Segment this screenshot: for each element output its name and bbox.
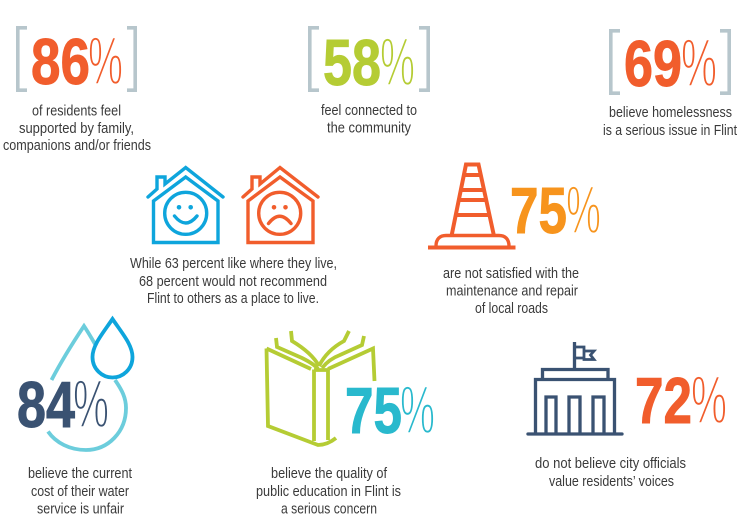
stat: 84 percent water [17, 319, 133, 518]
caption officials [535, 455, 686, 490]
stat: 75 percent education [256, 331, 435, 518]
caption water: service is unfair [37, 500, 124, 518]
caption 58%: the community [327, 120, 411, 136]
caption water: believe the current [28, 465, 133, 482]
number 75% orange: 75 [510, 174, 567, 247]
caption houses: 68 percent would not recommend [139, 273, 327, 290]
number 84%: % [73, 366, 109, 442]
number 69%: 69 [624, 27, 682, 100]
number 86%: % [88, 23, 123, 99]
caption houses: While 63 percent like where they live, [130, 255, 337, 272]
caption roads: of local roads [475, 300, 548, 317]
icon: happy house [148, 168, 223, 242]
caption education: public education in Flint is [256, 483, 401, 500]
icon: government building [528, 342, 622, 434]
caption 58% [321, 102, 417, 136]
number 75% orange: % [566, 172, 601, 248]
number 84%: 84 [17, 368, 75, 441]
brackets [18, 28, 135, 90]
stat: 75 percent roads [428, 164, 601, 317]
caption officials: do not believe city officials [535, 455, 686, 472]
caption 86%: companions and/or friends [3, 137, 151, 154]
stat: 72 percent officials [528, 342, 727, 490]
caption education [256, 465, 401, 518]
brackets [611, 31, 729, 93]
caption roads: are not satisfied with the [443, 265, 579, 282]
icon: traffic cone [428, 164, 516, 248]
icon: sad house [243, 168, 318, 242]
stat: 58 percent connected [310, 24, 428, 136]
number 72%: 72 [635, 364, 692, 437]
caption water: cost of their water [31, 483, 129, 500]
stat: 86 percent supported [3, 23, 151, 154]
number 86%: 86 [31, 25, 90, 98]
number 69%: % [681, 25, 717, 101]
number 58%: % [380, 24, 415, 100]
caption roads: maintenance and repair [446, 282, 578, 300]
houses block [130, 168, 337, 307]
caption 69% [603, 104, 738, 139]
caption education: believe the quality of [271, 465, 388, 482]
caption education: a serious concern [281, 500, 377, 518]
caption roads [443, 265, 579, 317]
stat: 69 percent homelessness [603, 25, 738, 139]
number 58%: 58 [323, 26, 381, 99]
caption 86% [3, 102, 151, 154]
caption 86%: supported by family, [19, 120, 134, 137]
caption water [28, 465, 133, 518]
caption 86%: of residents feel [32, 102, 121, 120]
caption officials: value residents’ voices [549, 473, 674, 490]
brackets [310, 28, 428, 90]
caption houses [130, 255, 337, 307]
icon: open book [266, 331, 374, 445]
caption houses: Flint to others as a place to live. [147, 290, 319, 307]
number 75% teal: % [400, 372, 435, 448]
number 75% teal: 75 [345, 374, 402, 447]
icon: large water drop [48, 326, 126, 450]
icon: small water drop [92, 319, 132, 378]
caption 58%: feel connected to [321, 102, 417, 119]
